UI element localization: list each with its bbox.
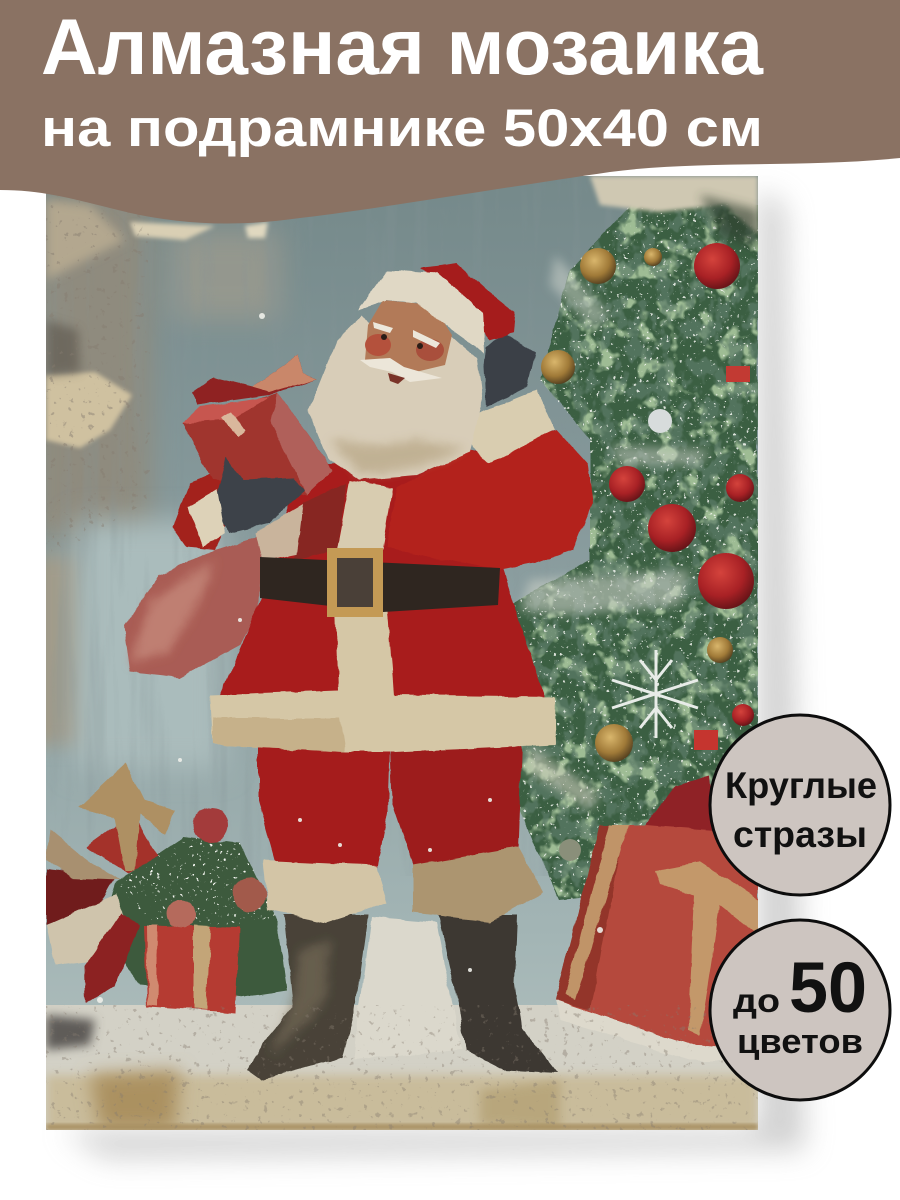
gifts lower right: [555, 775, 758, 1060]
red coat: [173, 430, 592, 700]
painting texture left edge: [46, 190, 758, 1130]
subtitle: на подрамнике 50х40 см: [41, 99, 763, 158]
trousers: [256, 746, 523, 868]
sleeve cuff: [463, 390, 555, 463]
snowflake: [612, 650, 698, 738]
snow speckles: [97, 313, 603, 1003]
tree ornaments: [541, 243, 754, 861]
coat fur trim: [210, 480, 556, 752]
boot cuffs: [263, 847, 543, 923]
center snow patch: [358, 916, 454, 1005]
canvas drop shadow: [62, 190, 805, 1158]
snowy floor: [46, 1005, 758, 1130]
Christmas tree: [500, 176, 758, 900]
painting: Santa Claus with Christmas tree: [30, 176, 758, 1130]
badge: round rhinestones: [710, 715, 890, 895]
hand glove raised: [485, 333, 535, 407]
hat brim over forehead: [358, 270, 485, 353]
face: [360, 300, 452, 384]
badge: up to 50 colours: цветов: [737, 1023, 863, 1061]
distressed top-right corner: [590, 176, 758, 250]
left cuff: [188, 490, 225, 547]
sack: [124, 535, 262, 678]
painting background wall: [46, 176, 758, 1005]
badge: up to 50 colours: до: [733, 982, 780, 1019]
beard: [308, 315, 483, 480]
badge: round rhinestones: стразы: [733, 814, 867, 855]
badge: up to 50 colours: [710, 920, 890, 1100]
badge: up to 50 colours: 50: [789, 949, 867, 1028]
title banner: [0, 0, 900, 223]
belt and buckle: [260, 553, 500, 612]
left glove: [213, 457, 305, 533]
boots: [247, 915, 558, 1080]
Santa Claus: [124, 263, 592, 1080]
badge: round rhinestones: Круглые: [725, 765, 877, 806]
hat: [358, 263, 515, 353]
gifts lower left: [46, 763, 286, 1013]
gift box held: [183, 355, 333, 495]
title: Алмазная мозаика: [41, 2, 764, 91]
